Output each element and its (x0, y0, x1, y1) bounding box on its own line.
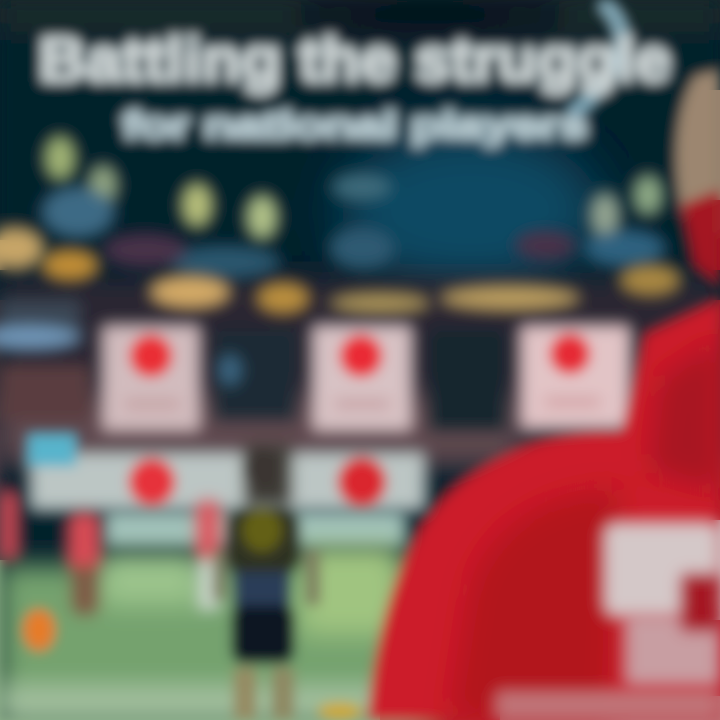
orange cone (23, 609, 55, 651)
grass pitch (0, 545, 440, 720)
banner: centre (312, 325, 412, 431)
foreground player in red jersey (318, 70, 720, 720)
left red players (0, 490, 220, 615)
spectators and floodlights in upper stands (42, 136, 665, 278)
subtitle: for national players (122, 105, 588, 147)
banner: right (520, 325, 630, 429)
central player (213, 448, 320, 720)
title: Battling the struggle (39, 26, 671, 95)
floodlight arc (570, 2, 622, 115)
gold lights band (0, 228, 680, 386)
banner: left (102, 325, 200, 431)
pitch-side advertising boards (28, 434, 425, 546)
